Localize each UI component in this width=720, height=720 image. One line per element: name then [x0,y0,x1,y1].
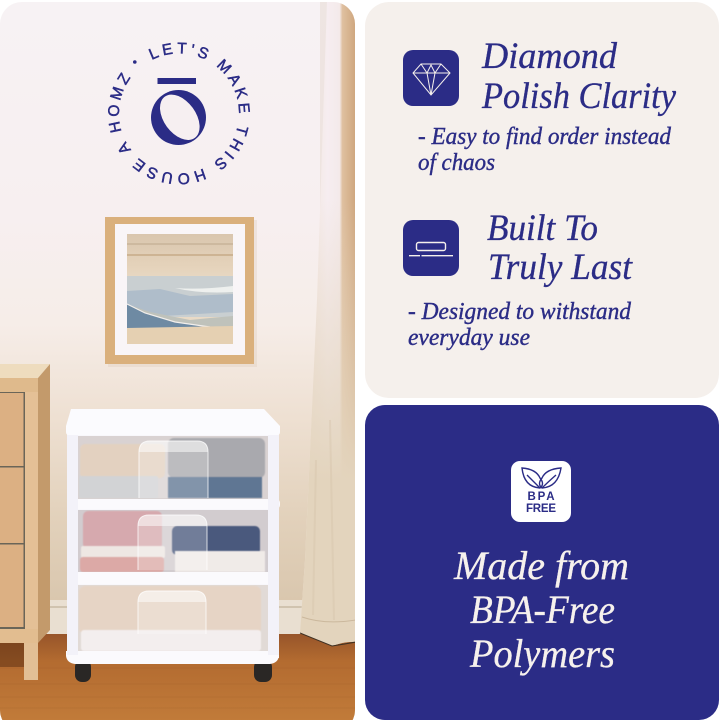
text: easy to find order [418,124,672,176]
storage drawers [66,409,280,682]
panel: room photo [0,2,355,720]
heading: made from bpa-free polymers: BPA-Free [470,587,615,632]
icon: bpa free badge [511,461,571,522]
text: designed to withstand [408,299,632,351]
framed art [105,217,257,367]
drawer 3 [78,585,268,651]
logo: let's make this house a homz [108,42,250,184]
heading: diamond polish clarity [481,36,677,117]
circular slogan: LET'S MAKE THIS HOUSE A HOMZ [108,42,250,184]
heading: made from bpa-free polymers [453,543,629,676]
heading: built to truly last [487,208,634,288]
baseboard [46,600,302,634]
text: designed to withstand: everyday use [408,325,530,351]
icon: slim profile [403,220,459,276]
icon: bpa free badge: BPA [528,491,554,503]
text: easy to find order: - Easy to find order instead [418,124,672,150]
heading: made from bpa-free polymers: Made from [453,543,629,588]
heading: diamond polish clarity: Diamond [481,36,617,77]
heading: built to truly last: Built To [487,208,598,249]
wheels [75,664,272,682]
dresser [0,364,50,680]
heading: built to truly last: Truly Last [488,247,634,288]
heading: made from bpa-free polymers: Polymers [469,631,615,676]
drawer 1 [78,436,268,499]
panel: features [365,2,719,398]
icon: bpa free badge: FREE [526,503,556,515]
drawer 2 [78,510,268,572]
text: designed to withstand: - Designed to withstand [408,299,632,325]
icon: diamond [403,50,459,106]
floor [0,634,355,720]
text: easy to find order: of chaos [418,150,495,176]
curtain [300,0,356,646]
heading: diamond polish clarity: Polish Clarity [481,76,677,117]
frame and shelves [66,409,280,664]
panel: bpa free [365,405,719,720]
